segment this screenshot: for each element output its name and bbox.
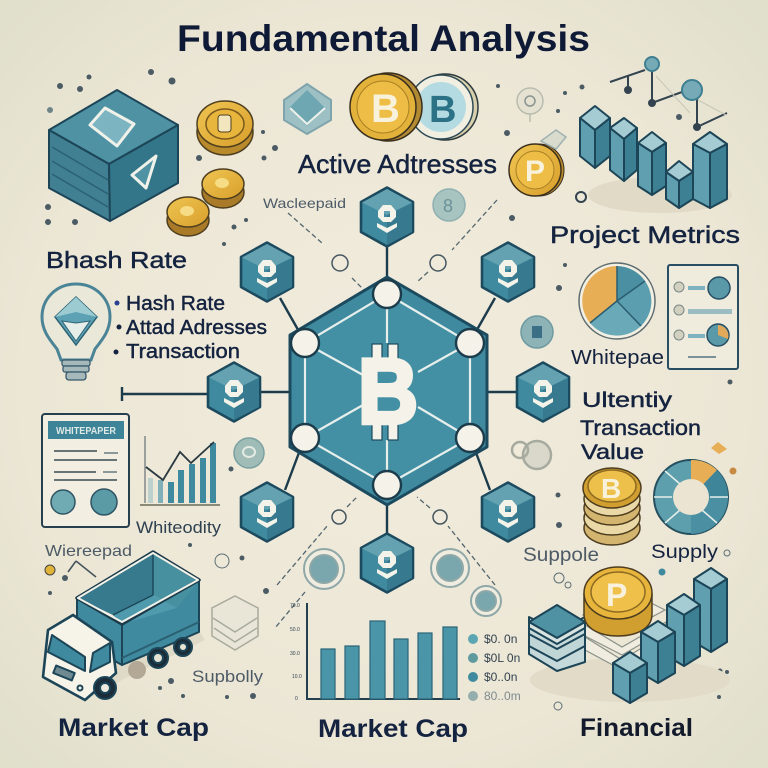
icon: pale swirl bbox=[512, 441, 551, 469]
bitcoin mark: B bbox=[358, 341, 418, 443]
icon: pale badge bbox=[234, 438, 264, 468]
coin on stack: P bbox=[606, 577, 627, 613]
heading: Project Metrics: Project Metrics bbox=[550, 222, 740, 249]
network diagram top right bbox=[610, 57, 727, 130]
inner panel bbox=[305, 294, 470, 485]
caption: Supbolly: Supbolly bbox=[192, 667, 264, 686]
wheels rear bbox=[128, 661, 146, 679]
text block: utility, transaction, value: Value bbox=[581, 441, 644, 464]
chart legend: 80..0m bbox=[484, 689, 521, 703]
scattered specks bbox=[45, 69, 732, 710]
icon: financial stack bbox=[529, 567, 730, 703]
caption: Supply: Supply bbox=[651, 542, 719, 563]
hexagon nodes bbox=[291, 280, 484, 499]
bar chart: market cap: 0 bbox=[295, 696, 298, 702]
heading: Bhash Rate: Bhash Rate bbox=[46, 247, 187, 273]
server stack bbox=[529, 605, 585, 671]
chart legend: $0..0n bbox=[484, 670, 517, 684]
node links bbox=[305, 294, 470, 485]
bullet list bbox=[114, 293, 267, 363]
icon: gold coins left bbox=[167, 101, 253, 236]
icon: gold coin right bbox=[509, 144, 564, 196]
donut chart bbox=[654, 460, 728, 534]
icon: gold and silver bitcoin coins: B bbox=[371, 87, 400, 131]
orange accent marks bbox=[711, 442, 736, 474]
bullet list: Attad Adresses bbox=[126, 317, 267, 339]
text block: utility, transaction, value: Ultentiy bbox=[582, 389, 673, 412]
coin on stack bbox=[584, 567, 652, 636]
bullet list: Transaction bbox=[126, 341, 240, 363]
icon: small nodes bbox=[541, 130, 614, 203]
icon: pale box bbox=[212, 596, 258, 650]
icon: coin stack: B bbox=[601, 473, 621, 504]
icon: truck bbox=[43, 552, 205, 700]
icon: coin stack bbox=[583, 468, 641, 545]
icon: teal round badge bbox=[521, 316, 553, 348]
ground shadow bbox=[70, 632, 205, 700]
cargo interior bbox=[77, 552, 153, 615]
heading: Financial: Financial bbox=[580, 714, 693, 742]
pie chart bbox=[579, 263, 655, 339]
icon: gold and silver bitcoin coins bbox=[350, 73, 478, 141]
spoke lines bbox=[122, 246, 517, 534]
cargo side walls bbox=[77, 598, 122, 665]
3D bar chart: project metrics bbox=[580, 106, 732, 213]
chart legend: $0L 0n bbox=[484, 651, 520, 665]
caption: Suppole: Suppole bbox=[523, 545, 599, 566]
cab bbox=[43, 615, 116, 700]
magnifier nodes bbox=[332, 255, 447, 524]
bar chart: market cap: 70.0 bbox=[290, 603, 300, 609]
heading: Market Cap left: Market Cap bbox=[58, 714, 209, 742]
document card left bbox=[42, 414, 129, 527]
line and bar chart left bbox=[140, 436, 220, 505]
bar chart: market cap: 10.0 bbox=[292, 674, 302, 680]
dashed connector lines bbox=[275, 200, 497, 628]
white layered base bbox=[583, 590, 668, 670]
text block: utility, transaction, value bbox=[580, 389, 701, 464]
title: Fundamental Analysis bbox=[177, 18, 590, 59]
bullet list: Hash Rate bbox=[126, 293, 225, 315]
satellite hexagon icons bbox=[208, 188, 569, 592]
round badges bottom bbox=[304, 549, 501, 616]
caption: Whitepae: Whitepae bbox=[571, 347, 664, 369]
icon: pale coin bbox=[433, 189, 465, 221]
cargo rim bbox=[77, 552, 199, 624]
bar chart: market cap: 50.0 bbox=[290, 627, 300, 633]
chart legend: $0. 0n bbox=[484, 632, 517, 646]
icon: light bulb bbox=[42, 284, 110, 380]
icon: isometric box bbox=[49, 90, 178, 221]
central hexagon network bbox=[122, 246, 517, 534]
financial 3D bars bbox=[613, 568, 727, 703]
bar chart: market cap: 30.0 bbox=[290, 651, 300, 657]
text block: utility, transaction, value: Transaction bbox=[580, 417, 701, 440]
caption: Whiteodity: Whiteodity bbox=[136, 518, 222, 537]
icon: gold and silver bitcoin coins: B bbox=[429, 89, 456, 131]
small mark near truck bbox=[68, 561, 96, 577]
big hexagon bbox=[290, 277, 487, 505]
heading: Active Adtresses: Active Adtresses bbox=[298, 149, 497, 179]
metrics card bbox=[668, 265, 738, 369]
icon: pale coin: 8 bbox=[443, 196, 453, 216]
icon: pale diamond gem bbox=[284, 84, 331, 134]
bar chart: market cap bbox=[290, 603, 460, 702]
icon: pale target bbox=[517, 88, 543, 122]
document card left: WHITEPAPER bbox=[56, 426, 117, 437]
heading: Market Cap centre: Market Cap bbox=[318, 715, 468, 743]
caption: Wacleepaid: Wacleepaid bbox=[263, 195, 346, 211]
chart legend bbox=[468, 632, 521, 703]
icon: gold coin right: P bbox=[525, 155, 545, 188]
caption: Wiereepad: Wiereepad bbox=[45, 543, 132, 560]
